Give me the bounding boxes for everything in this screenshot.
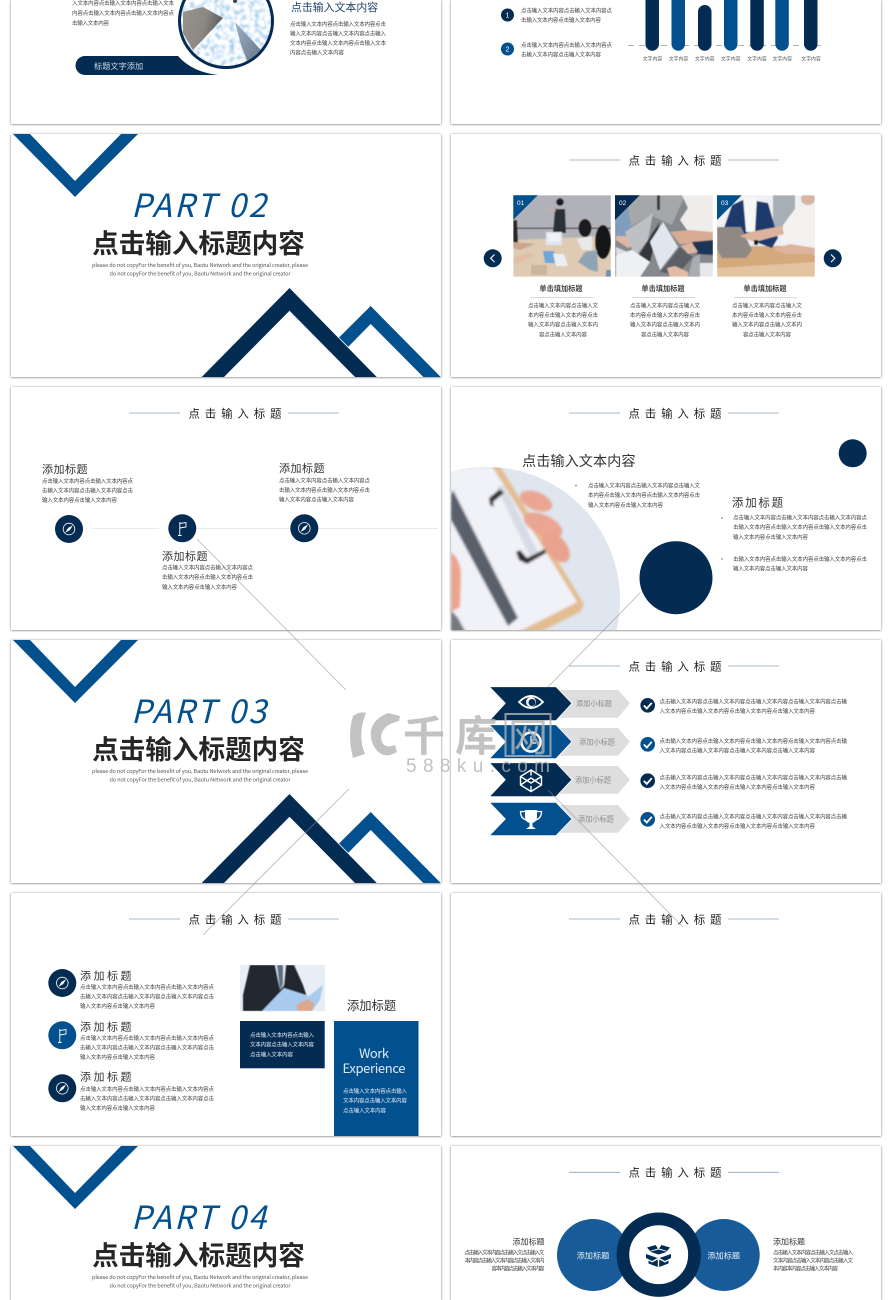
timeline line	[93, 528, 438, 530]
watermark logo: 588ku.com	[406, 756, 550, 777]
dark text box: 点击输入文本内容点击输入	[250, 1031, 314, 1039]
item 3: 点击输入文本内容点击输入文本内容点击输入文本内容点	[80, 1085, 214, 1093]
arrow: clock	[489, 725, 572, 759]
heading: 点击输入标题	[628, 1166, 726, 1180]
text block: main	[522, 453, 700, 509]
icon: flag	[168, 514, 196, 542]
card 1: 01	[517, 200, 525, 207]
text block: right paragraph: 点击输入文本内容	[291, 0, 378, 14]
panel: image intro slide	[11, 0, 441, 124]
dark text box: 点击输入文本内容	[250, 1050, 293, 1058]
card 1: 单击填加标题	[539, 284, 583, 293]
right text block: 文本内容点击输入文本内容点击输入文	[773, 1256, 853, 1264]
bullet 1	[501, 6, 612, 24]
text block: right paragraph: 内容点击输入文本内容	[290, 48, 344, 56]
nav button left	[484, 249, 502, 267]
item 2: 点击输入文本内容点击输入文本内容点击输入文本内容点	[80, 1034, 214, 1042]
item 1: 添加标题	[80, 968, 134, 982]
text block: right paragraph: 文本内容点击输入文本内容点击输入文本	[290, 39, 386, 47]
list item 4: 点击输入文本内容点击输入文本内容点击输入文本内容点击输入文本内容点击输	[660, 812, 847, 820]
subtitle: do not copyFor the benefit of you, Baotu Network and the original creator	[110, 270, 291, 278]
bullet 2: 击输入文本内容点击输入文本内容	[521, 50, 601, 58]
circle: large dark dot	[640, 541, 712, 614]
card 3: 本内容点击输入文本内容点击	[732, 311, 802, 319]
panel: timeline slide	[11, 387, 441, 630]
arrow: eye	[489, 687, 572, 721]
tab labels: 添加小标题	[575, 776, 611, 784]
item 3: 输入文本内容点击输入文本内容	[80, 1104, 155, 1112]
side heading: 添加标题	[347, 999, 396, 1013]
text block: side: 点击输入文本内容点击输入文本内容点击输入文本内容点	[733, 514, 867, 522]
panel: arrow list slide	[451, 640, 881, 883]
watermark diagonal lines	[197, 539, 683, 935]
heading: 点击输入标题	[628, 406, 726, 420]
tab labels: 添加小标题	[576, 699, 612, 708]
part number: PART 02	[131, 181, 269, 227]
bar chart: 文字内容	[773, 56, 792, 62]
item 1: 击输入文本内容点击输入文本内容点击输入文本内容点击	[80, 992, 214, 1000]
card 3	[717, 193, 815, 338]
text block: right paragraph: 输入文本内容点击输入文本内容点击输入	[290, 30, 386, 38]
item 3: 击输入文本内容点击输入文本内容点击输入文本内容点击	[80, 1094, 214, 1102]
item 2: 添加标题	[80, 1020, 134, 1034]
panel: part 02 cover	[11, 134, 441, 377]
arrow: trophy	[489, 802, 572, 836]
text block: right paragraph: 点击输入文本内容点击输入文本内容点击	[290, 20, 386, 28]
icon: compass	[55, 515, 83, 543]
panel: photo cards slide	[451, 134, 881, 377]
subtitle: do not copyFor the benefit of you, Baotu Network and the original creator	[110, 776, 291, 784]
milestone 2 text	[162, 549, 253, 591]
bullet 1: 点击输入文本内容点击输入文本内容点	[521, 6, 612, 14]
list item 3: 点击输入文本内容点击输入文本内容点击输入文本内容点击输入文本内容点击输	[660, 773, 847, 781]
image: clipboard in circle	[451, 467, 620, 630]
card 2: 单击填加标题	[641, 284, 685, 293]
right text block: 点击输入文本内容点击输入文点击输入	[773, 1248, 853, 1256]
watermark logo: 千库	[403, 713, 507, 760]
blue work experience box: 点击输入文本内容点击输入	[343, 1087, 407, 1095]
list item 3	[640, 773, 847, 791]
left text block: 点击输入文本内容点击输入文点击输入文	[464, 1248, 545, 1256]
bullet 2: 点击输入文本内容点击输入文本内容点	[521, 41, 612, 49]
tab labels: 添加小标题	[579, 738, 615, 746]
watermark logo	[350, 712, 550, 777]
list item 4	[640, 812, 847, 830]
milestone 1 text: 击输入文本内容点击输入文本内容点击	[42, 486, 133, 494]
panel: part 03 cover	[11, 640, 441, 883]
list item 1: 入文本内容点击输入文本内容点击输入文本内容点击输入文本内容	[660, 707, 815, 715]
blue work experience box: Work	[359, 1043, 390, 1062]
part number: PART 04	[131, 1193, 268, 1239]
heading: 点击输入标题	[628, 659, 726, 673]
item 3: 添加标题	[80, 1070, 134, 1084]
subtitle: please do not copyFor the benefit of you, Baotu Network and the original creator, please	[92, 767, 308, 775]
arrow: cube	[489, 763, 572, 797]
text block: side: 击输入文本内容点击输入文本内容点击输入文本内容点击	[733, 555, 867, 563]
left text block: 容本内容点击输入文本内容	[492, 1264, 545, 1272]
text block: side: 输入文本内容点击输入文本内容	[733, 533, 808, 541]
milestone 3 text	[279, 461, 370, 504]
card 3: 单击填加标题	[743, 284, 787, 293]
heading: 点击输入标题	[628, 912, 726, 926]
right text block: 本内容本内容点击输入文本内容	[773, 1264, 838, 1272]
list item 1	[640, 698, 847, 715]
item 1: 输入文本内容点击输入文本内容	[80, 1002, 155, 1010]
text block: left paragraph: 内容点击输入文本内容点击输入文本内容点	[72, 9, 174, 17]
chevron decoration	[13, 640, 138, 703]
text block: left paragraph: 入文本内容点击输入文本内容点击输入文本	[72, 0, 174, 7]
bar chart: 文字内容	[721, 56, 741, 62]
card 3: 输入文本内容点击输入文本内	[732, 321, 802, 329]
text block: main: 点击输入文本内容点击输入文本内容点击输入文	[588, 482, 700, 490]
item 1: 点击输入文本内容点击输入文本内容点击输入文本内容点	[80, 983, 214, 991]
bullet 2	[501, 41, 612, 58]
left text block: 添加标题	[512, 1236, 544, 1246]
nav button right	[824, 249, 842, 267]
subtitle	[92, 767, 308, 784]
mountains decoration	[202, 288, 441, 377]
card 3: 点击输入文本内容点击输入文	[732, 302, 802, 310]
panel: empty title slide	[451, 893, 881, 1136]
heading: 点击输入标题	[188, 912, 286, 926]
item 2	[48, 1020, 214, 1061]
title: 点击输入标题内容	[92, 1241, 305, 1271]
list item 3: 入文本内容点击输入文本内容点击输入文本内容点击输入文本内容	[660, 783, 815, 791]
milestone 1 text	[42, 462, 133, 504]
milestone 2 text: 输入文本内容点击输入文本内容	[162, 583, 237, 591]
chevron decoration	[13, 134, 138, 197]
milestone 1 text: 添加标题	[42, 462, 88, 476]
circle: small dark dot	[839, 439, 867, 467]
subtitle	[92, 1273, 308, 1290]
bar chart: 文字内容	[747, 56, 767, 62]
milestone 3 text: 击输入文本内容点击输入文本内容点击	[279, 486, 370, 494]
text block: side: 击输入文本内容点击输入文本内容点击输入文本内容点击	[733, 523, 867, 531]
card 1: 本内容点击输入文本内容点击	[528, 311, 598, 319]
card 1	[513, 195, 611, 338]
bullet 1: 1	[506, 12, 510, 20]
left text block	[464, 1236, 545, 1272]
list item 2	[640, 737, 847, 754]
panel: clipboard slide	[451, 387, 881, 640]
title: 点击输入标题内容	[92, 735, 305, 765]
tab labels: 添加小标题	[578, 814, 614, 824]
milestone 2 text: 添加标题	[162, 549, 208, 563]
right circle: 添加标题	[707, 1250, 740, 1260]
image: businessman with folder	[240, 965, 325, 1011]
bar chart: 文字内容	[669, 56, 688, 62]
right text block: 添加标题	[773, 1236, 805, 1246]
text block: left paragraph	[72, 0, 174, 27]
panel: circles slide	[451, 1146, 881, 1300]
milestone 2 text: 击输入文本内容点击输入文本内容点击	[162, 573, 253, 581]
heading: 点击输入标题	[188, 406, 286, 420]
card 1: 点击输入文本内容点击输入文	[528, 302, 598, 310]
icon: compass	[290, 514, 318, 542]
left text block: 本内容点击输入文本内容点击输入文本内	[464, 1256, 544, 1264]
card 2: 容点击输入文本内容	[641, 330, 689, 338]
part number: PART 03	[131, 687, 269, 733]
item 3	[48, 1070, 214, 1112]
card 2	[615, 195, 713, 338]
milestone 1 text: 输入文本内容点击输入文本内容	[42, 496, 117, 504]
subtitle: please do not copyFor the benefit of you, Baotu Network and the original creator, please	[92, 1273, 308, 1281]
blue work experience box: 点击输入文本内容	[343, 1106, 386, 1114]
label pill: 标题文字添加	[94, 61, 143, 71]
card 3: 容点击输入文本内容	[743, 330, 791, 338]
text block: main: 点击输入文本内容	[522, 453, 636, 470]
left circle: 添加标题	[577, 1250, 609, 1260]
mountains decoration	[202, 794, 441, 883]
text block: main: 输入文本内容点击输入文本内容	[588, 501, 663, 509]
card 1: 容点击输入文本内容	[539, 330, 587, 338]
list item 1: 点击输入文本内容点击输入文本内容点击输入文本内容点击输入文本内容点击输	[660, 698, 847, 706]
panel: work experience slide	[11, 893, 441, 1136]
list item 4: 入文本内容点击输入文本内容点击输入文本内容点击输入文本内容	[660, 822, 815, 830]
card 2: 输入文本内容点击输入文本内	[630, 321, 700, 329]
text block: right paragraph	[290, 0, 386, 56]
heading: 点击输入标题	[628, 153, 726, 167]
milestone 3 text: 添加标题	[279, 461, 325, 475]
title: 点击输入标题内容	[92, 229, 305, 259]
bar chart	[628, 0, 826, 62]
watermark logo: 网	[508, 716, 548, 760]
image: skyscrapers in round frame	[178, 0, 274, 69]
milestone 3 text: 输入文本内容点击输入文本内容	[279, 496, 354, 504]
blue work experience box: Experience	[342, 1058, 406, 1077]
right circle	[688, 1219, 760, 1291]
text block: side	[721, 496, 867, 572]
list item 2: 入文本内容点击输入文本内容点击输入文本内容点击输入文本内容	[660, 746, 815, 754]
card 2: 02	[619, 200, 627, 207]
bar chart: 文字内容	[643, 56, 662, 62]
bullet 2: 2	[506, 46, 510, 54]
label pill	[76, 56, 218, 75]
blue work experience box: 文本内容点击输入文本内容	[343, 1097, 407, 1105]
blue work experience box	[334, 1021, 418, 1136]
right text block	[773, 1236, 853, 1272]
item 2: 击输入文本内容点击输入文本内容点击输入文本内容点击	[80, 1044, 214, 1052]
subtitle: please do not copyFor the benefit of you, Baotu Network and the original creator, please	[92, 261, 308, 269]
milestone 2 text: 点击输入文本内容点击输入文本内容点	[162, 564, 253, 572]
bullet 1: 击输入文本内容点击输入文本内容	[521, 16, 601, 24]
bar chart: 文字内容	[695, 56, 715, 62]
subtitle: do not copyFor the benefit of you, Baotu Network and the original creator	[110, 1282, 291, 1290]
card 3: 03	[721, 200, 729, 207]
item 1	[48, 968, 214, 1010]
text block: side: 添加标题	[732, 496, 785, 510]
panel: bar chart slide	[451, 0, 881, 124]
subtitle	[92, 261, 308, 278]
milestone 1 text: 点击输入文本内容点击输入文本内容点	[42, 477, 133, 485]
chevron decoration	[13, 1146, 138, 1209]
tab labels	[575, 699, 615, 824]
center ring with box icon	[623, 1219, 694, 1290]
gray tabs	[560, 690, 630, 833]
list item 2: 点击输入文本内容点击输入文本内容点击输入文本内容点击输入文本内容点击输	[660, 737, 847, 745]
card 2: 本内容点击输入文本内容点击	[630, 311, 700, 319]
panel: part 04 cover	[11, 1146, 441, 1300]
item 2: 输入文本内容点击输入文本内容	[80, 1053, 155, 1061]
text block: side: 输入文本内容点击输入文本内容	[733, 564, 808, 572]
dark text box	[240, 1021, 325, 1068]
dark text box: 文本内容点击输入文本内容	[250, 1040, 314, 1048]
left circle	[557, 1219, 629, 1291]
bar chart: 文字内容	[801, 56, 821, 62]
milestone 3 text: 点击输入文本内容点击输入文本内容点	[279, 476, 370, 484]
text block: left paragraph: 击输入文本内容	[72, 19, 109, 27]
card 2: 点击输入文本内容点击输入文	[630, 302, 700, 310]
text block: main: 本内容点击输入文本内容点击输入文本内容点击	[588, 491, 700, 499]
card 1: 输入文本内容点击输入文本内	[528, 321, 598, 329]
